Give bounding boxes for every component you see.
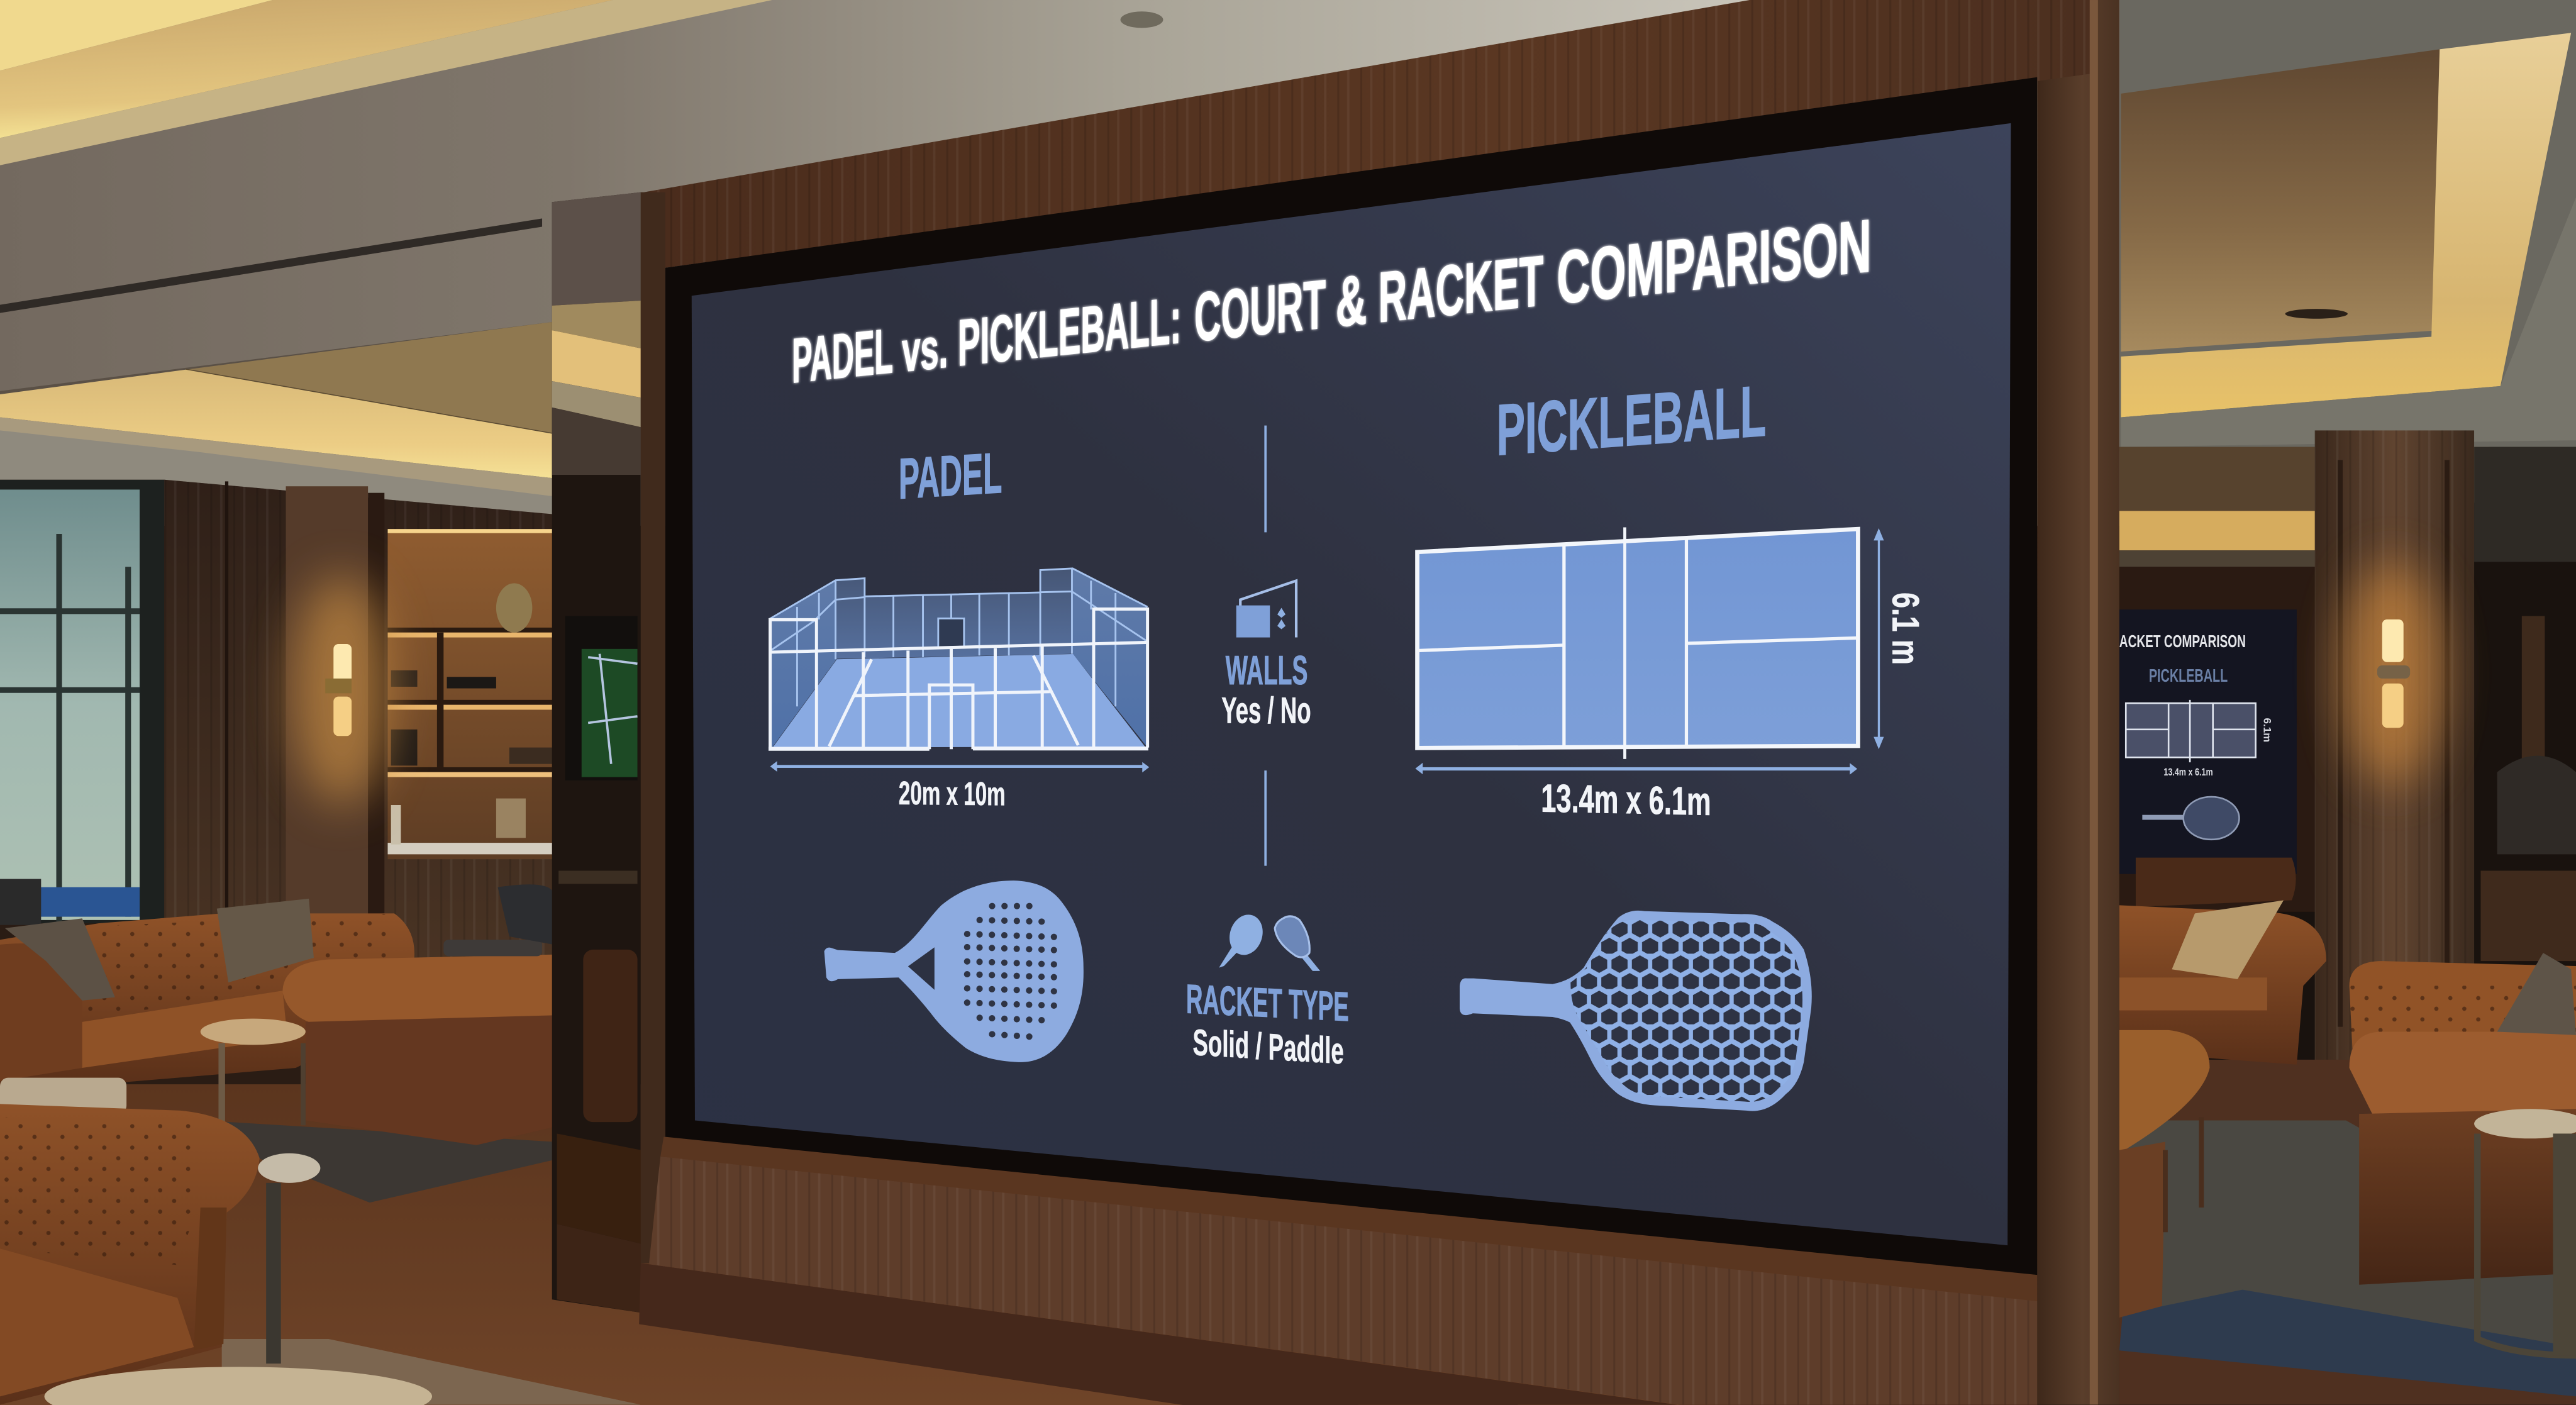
- pickleball height arrow: [1874, 528, 1884, 749]
- pillar right with sconce: [2315, 430, 2474, 1063]
- recessed ceiling spot: [1121, 11, 1163, 28]
- reflected width: 6.1m: [2262, 718, 2273, 742]
- pickleball court diagram: [1418, 528, 1858, 759]
- wall sconce left: [292, 575, 391, 805]
- right floor and rug: [2119, 1060, 2576, 1404]
- reflected title: ACKET COMPARISON: [2119, 631, 2246, 651]
- right wood post: [2037, 0, 2119, 1404]
- right lounge background: [2119, 447, 2576, 1104]
- chesterfield sofa right: [2350, 953, 2576, 1285]
- cushions on left sofa: [5, 899, 314, 1001]
- reflected small display: pickleball side: [2119, 609, 2297, 874]
- leather ottoman right: [2119, 1030, 2209, 1318]
- side table: [258, 1153, 320, 1363]
- title: vs.: [902, 316, 948, 384]
- padel court diagram: [769, 569, 1148, 749]
- round table foreground: [45, 1367, 432, 1405]
- title: PICKLEBALL:: [958, 284, 1181, 380]
- walls values: Yes / No: [1221, 690, 1311, 731]
- walls label: WALLS: [1226, 647, 1307, 693]
- title: COMPARISON: [1557, 204, 1872, 320]
- title: COURT: [1194, 265, 1326, 357]
- pickleball width arrow: [1415, 763, 1857, 775]
- front chesterfield chair left: [0, 1104, 260, 1404]
- sofa: tufted back left: [0, 913, 414, 1084]
- side table right: [2474, 1109, 2576, 1355]
- LED display screen: [692, 123, 2011, 1245]
- racket type icon: padel: [1219, 910, 1268, 968]
- pickleball paddle: [1460, 911, 1812, 1111]
- padel racket: [824, 880, 1084, 1062]
- title: &: [1336, 259, 1367, 342]
- title: [792, 204, 1872, 397]
- centre divider bottom: [1264, 770, 1267, 866]
- heading: padel: PADEL: [899, 441, 1002, 511]
- reflected heading: PICKLEBALL: [2149, 666, 2228, 686]
- mirror column left of display: [552, 192, 641, 1313]
- ceiling: right recess and cove light: [2119, 0, 2576, 452]
- padel dimensions label: 20m x 10m: [899, 775, 1006, 813]
- beige ottoman: [0, 1078, 126, 1114]
- left wall: window and wood paneling: [0, 480, 553, 986]
- ceiling: left and centre: [0, 0, 2576, 526]
- sofa behind right: [2119, 858, 2326, 1065]
- heading: pickleball: PICKLEBALL: [1497, 370, 1766, 471]
- reflected dimensions: 13.4m x 6.1m: [2163, 766, 2213, 778]
- racket type values: Solid / Paddle: [1192, 1022, 1344, 1072]
- title: PADEL: [792, 316, 893, 397]
- wood display frame: [639, 0, 2098, 1405]
- floor left and under display: [0, 1084, 2037, 1405]
- padel dimension arrow: [770, 761, 1149, 772]
- walls icon: [1236, 580, 1296, 638]
- coffee table: [201, 1019, 306, 1125]
- reflected paddle: [2142, 797, 2239, 840]
- pickleball height label: 6.1 m: [1884, 592, 1926, 665]
- centre divider top: [1264, 426, 1267, 532]
- racket type icon: paddle: [1275, 916, 1320, 971]
- title: RACKET: [1379, 241, 1543, 338]
- pickleball dimensions label: 13.4m x 6.1m: [1541, 776, 1711, 824]
- racket type label: RACKET TYPE: [1186, 975, 1349, 1030]
- reflected court: [2126, 700, 2256, 762]
- built-in lit shelves: [387, 529, 553, 859]
- armchair sofa centre-left: [282, 884, 553, 1145]
